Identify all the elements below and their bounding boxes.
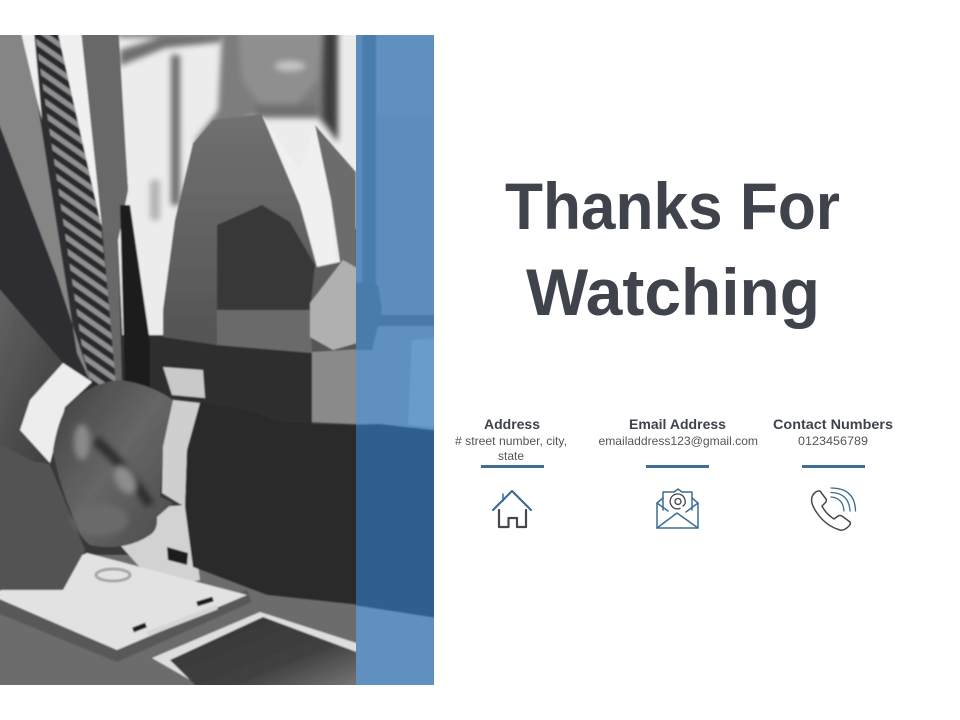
- woman: jacket: [163, 114, 378, 425]
- email heading: Email Address: [629, 417, 726, 432]
- contact: phone: [773, 417, 893, 530]
- dark right sleeve: [184, 408, 356, 606]
- left body and sleeve: [0, 440, 85, 590]
- address text: [455, 434, 567, 463]
- title: Thanks For: [505, 169, 840, 243]
- clipboard: [0, 590, 252, 662]
- table: [0, 554, 356, 685]
- photo: business handshake: [0, 35, 356, 685]
- blue photo panel: [356, 35, 434, 685]
- icon: envelope: [657, 489, 698, 528]
- address text: state: [498, 449, 524, 463]
- phone heading: Contact Numbers: [773, 417, 893, 432]
- icon: house: [493, 491, 531, 527]
- contact: email: [598, 417, 758, 528]
- icon: phone: [812, 488, 856, 530]
- email text: emailaddress123@gmail.com: [598, 434, 758, 448]
- address divider: [481, 465, 544, 468]
- phone text: 0123456789: [798, 434, 868, 448]
- title: Watching: [526, 255, 820, 329]
- contact: address: [455, 417, 567, 527]
- phone divider: [802, 465, 865, 468]
- address text: # street number, city,: [455, 434, 567, 448]
- window background: [117, 35, 356, 336]
- woman: hair and face: [193, 30, 338, 143]
- title: [505, 169, 840, 329]
- address heading: Address: [484, 417, 540, 432]
- left man jacket: [0, 35, 128, 390]
- email divider: [646, 465, 709, 468]
- shaking hands: [53, 380, 173, 547]
- tablet: [152, 611, 356, 680]
